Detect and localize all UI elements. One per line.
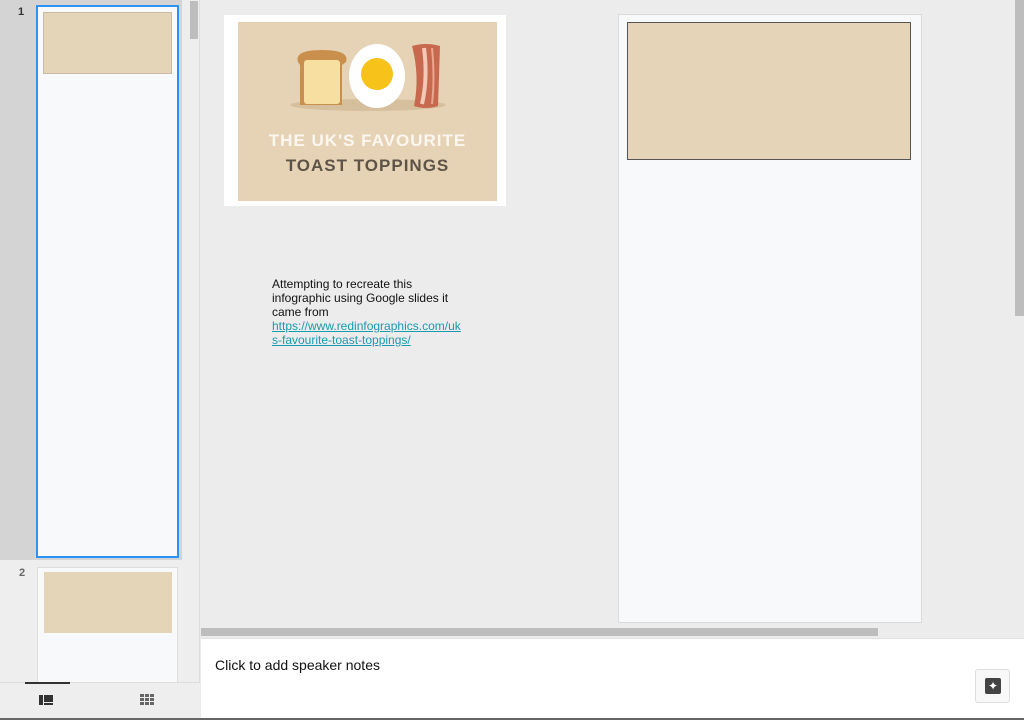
text block: note with link <box>272 277 461 347</box>
thumbnail 1 <box>36 5 179 558</box>
slide number 1: 1 <box>18 6 24 18</box>
panel: speaker notes <box>201 638 1024 718</box>
illustration: toast egg bacon <box>290 44 446 111</box>
sidebar bottom bar <box>0 682 200 719</box>
card: title image <box>224 15 506 206</box>
icon: explore button: ✦ <box>988 679 998 693</box>
right scrollbar <box>1015 0 1024 316</box>
icon: grid view <box>140 694 154 705</box>
icon: filmstrip view <box>39 695 53 705</box>
title line 1: THE UK'S FAVOURITE <box>269 131 466 150</box>
slide 1 row <box>0 0 182 560</box>
thumbnail 2 <box>37 567 178 687</box>
panel: slide sidebar <box>0 0 200 720</box>
title line 2: TOAST TOPPINGS <box>286 156 449 175</box>
notes placeholder text: Click to add speaker notes <box>215 657 380 673</box>
panel: slide page <box>618 14 922 623</box>
beige header rectangle <box>627 22 911 160</box>
horizontal scrollbar <box>201 628 878 636</box>
text block: note with link: https://www.redinfographics.com/uks-favourite-toast-toppings/ <box>272 319 461 347</box>
text block: note with link: Attempting to recreate this infographic using Google slides it came from <box>272 277 448 319</box>
slide number 2: 2 <box>19 567 25 579</box>
sidebar scrollbar <box>190 1 198 39</box>
icon: explore button <box>975 669 1010 703</box>
